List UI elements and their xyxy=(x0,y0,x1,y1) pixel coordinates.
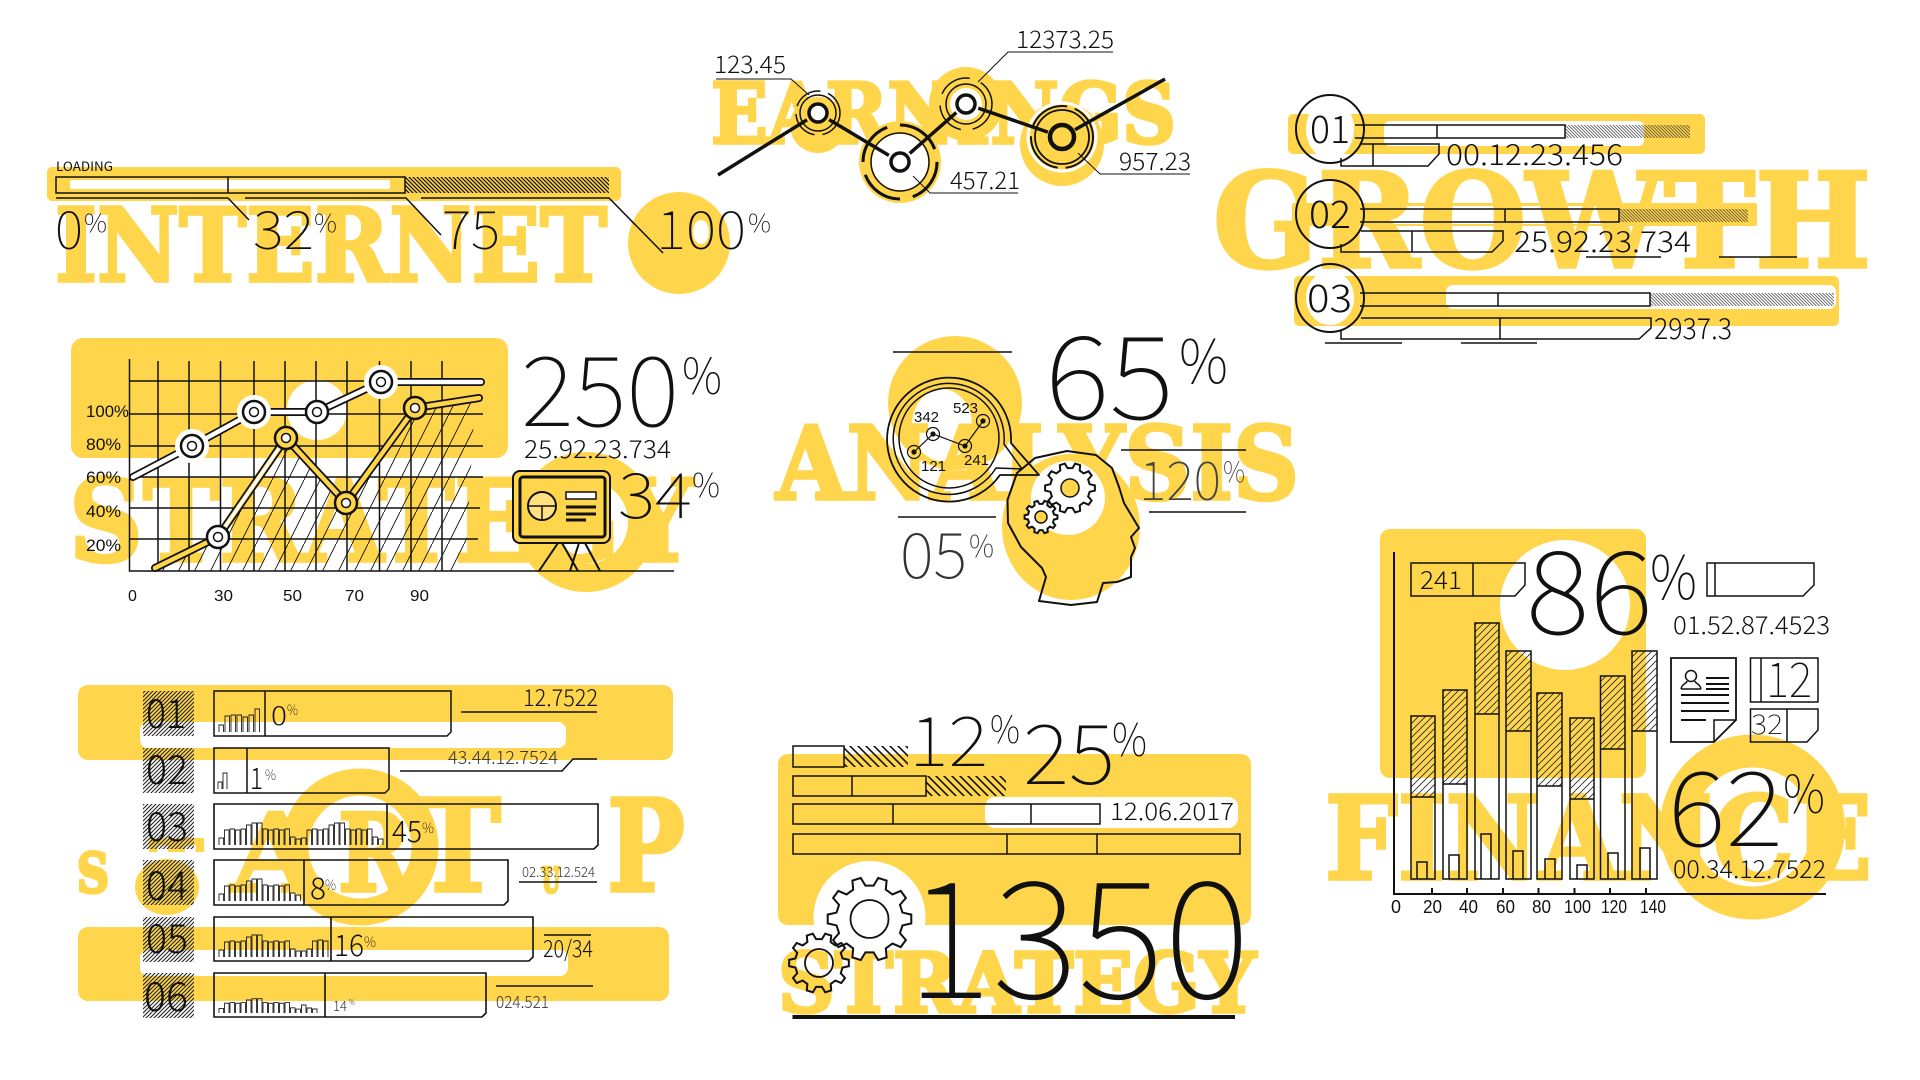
callout: 457.21: 457.21 xyxy=(950,161,1020,196)
x axis labels: 50 xyxy=(283,588,302,605)
heading: START UP letters: A xyxy=(230,791,323,917)
series 1 line xyxy=(133,382,481,477)
row 02: % xyxy=(265,765,276,785)
x axis labels: 100 xyxy=(1564,897,1591,917)
value: 86%: % xyxy=(1650,530,1697,617)
row 02: 1 xyxy=(250,754,263,798)
row 02: 02 xyxy=(1309,184,1351,239)
row 03 xyxy=(1296,264,1834,348)
callout: 457.21 xyxy=(913,161,1020,196)
value: 05%: % xyxy=(969,522,994,566)
row 02 xyxy=(143,738,597,798)
value: 75: 75 xyxy=(442,189,500,265)
panel: internet loading bar xyxy=(47,156,771,305)
yellow card with white cut-outs xyxy=(778,746,1251,973)
row 03: % xyxy=(422,818,434,838)
row 04: 04 xyxy=(146,854,188,912)
trend line xyxy=(718,79,1165,175)
value: 12% xyxy=(909,686,1020,786)
icon: speech bubble chart xyxy=(887,378,1039,502)
x axis labels: 40 xyxy=(1459,897,1478,917)
icon: speech bubble chart: 523 xyxy=(953,400,978,417)
heading: START UP letters: S xyxy=(77,841,109,905)
value: 05%: 05 xyxy=(900,506,967,597)
row 04: % xyxy=(325,875,336,895)
row 05: % xyxy=(364,932,376,952)
row 02: 43.44.12.7524 xyxy=(448,744,558,770)
y axis labels: 40% xyxy=(86,502,121,521)
value: 0%: 0 xyxy=(55,189,83,265)
chart axes xyxy=(1394,552,1826,894)
panel: strategy bars and gears xyxy=(778,686,1257,1045)
row 01: 00.12.23.456 xyxy=(1446,132,1623,174)
value: 32% xyxy=(253,189,337,265)
panel: strategy line chart xyxy=(69,313,722,605)
heading: START UP letters: P xyxy=(607,772,685,921)
box: 12: 12 xyxy=(1766,641,1812,711)
yellow node backgrounds xyxy=(790,67,1104,203)
value: 0% xyxy=(55,189,107,265)
value: 86%: 86 xyxy=(1526,500,1653,668)
value: 1350: 1350 xyxy=(906,809,1250,1045)
heading: GROWTH: GROWTH xyxy=(1213,144,1871,298)
value: 62%: % xyxy=(1783,753,1825,829)
white node centres xyxy=(872,88,1096,190)
y axis labels xyxy=(86,402,129,555)
node 2 xyxy=(863,125,937,199)
row 03: 2937.3 xyxy=(1654,306,1732,348)
row 03: 03 xyxy=(1307,268,1352,323)
node 1 xyxy=(796,91,840,135)
value: 250%: % xyxy=(682,337,722,409)
icon: speech bubble chart: 121 xyxy=(921,458,946,475)
row 01: 01 xyxy=(1310,99,1350,154)
row 03: 03 xyxy=(146,795,188,853)
row 06: % xyxy=(349,997,355,1008)
value: 0%: % xyxy=(84,204,107,240)
yellow bars behind rows xyxy=(1288,114,1839,326)
date: 12.06.2017: 12.06.2017 xyxy=(1110,792,1234,827)
tag: 241: 241 xyxy=(1420,561,1462,597)
row 02 xyxy=(1296,180,1797,261)
value: 05% xyxy=(900,506,994,597)
row 04: 02.33.12.524 xyxy=(522,862,595,882)
y axis labels: 60% xyxy=(86,468,121,487)
panel: finance bar chart xyxy=(1325,500,1872,917)
row 01: % xyxy=(287,700,298,720)
row 01: 01 xyxy=(146,682,186,740)
y axis labels: 20% xyxy=(86,536,121,555)
yellow bars and circles xyxy=(78,685,673,1001)
row 06: 024.521 xyxy=(496,988,549,1013)
x axis labels: 70 xyxy=(345,588,364,605)
series 2 line xyxy=(155,398,479,568)
chart xyxy=(86,359,674,605)
label: LOADING: LOADING xyxy=(56,156,113,175)
row 05: 20/34 xyxy=(543,930,593,964)
yellow card and shapes xyxy=(71,338,508,458)
row 04: 8 xyxy=(310,864,326,908)
callout: 957.23: 957.23 xyxy=(1119,142,1191,177)
value: 25%: 25 xyxy=(1023,688,1115,808)
callout: 123.45 xyxy=(714,45,809,95)
icon: presentation monitor xyxy=(513,471,610,571)
bars xyxy=(1411,623,1657,879)
series 1 nodes xyxy=(175,365,398,463)
x axis labels: 20 xyxy=(1423,897,1442,917)
panel: start up rows xyxy=(77,679,685,1023)
panel: growth bars xyxy=(1213,95,1871,348)
row 05: 05 xyxy=(146,907,188,965)
value: 34%: 34 xyxy=(618,446,692,537)
value: 34%: % xyxy=(692,459,720,507)
x axis labels: 30 xyxy=(214,588,233,605)
row 02: 02 xyxy=(146,738,188,796)
row 05 xyxy=(143,907,593,965)
value: 32%: % xyxy=(314,204,337,240)
heading: START UP letters: T xyxy=(150,826,203,906)
callout: 123.45: 123.45 xyxy=(714,45,786,80)
row 03 xyxy=(143,795,598,853)
y axis labels: 100% xyxy=(86,402,129,421)
value: 12%: % xyxy=(990,699,1020,754)
heading: START UP letters: R xyxy=(338,791,412,917)
callout: 12373.25 xyxy=(978,20,1114,82)
value: 120%: 120 xyxy=(1139,437,1221,516)
node 3 xyxy=(940,78,992,130)
heading: START UP letters: T xyxy=(415,772,501,921)
value: 25%: % xyxy=(1112,704,1147,769)
box: 32: 32 xyxy=(1751,703,1783,742)
callout: 957.23 xyxy=(1078,142,1191,177)
panel: earnings line xyxy=(711,20,1191,203)
value: 00.34.12.7522: 00.34.12.7522 xyxy=(1673,850,1826,886)
x axis labels: 60 xyxy=(1496,897,1515,917)
row 05: 16 xyxy=(334,921,364,965)
x axis labels xyxy=(128,588,429,605)
x axis labels: 120 xyxy=(1601,897,1627,917)
row 01 xyxy=(1296,95,1690,174)
value: 25.92.23.734: 25.92.23.734 xyxy=(524,430,671,466)
row 06 xyxy=(143,965,593,1023)
x axis labels xyxy=(1391,897,1666,917)
row 03: 45 xyxy=(392,807,422,851)
x axis labels: 140 xyxy=(1640,897,1666,917)
heading: STRATEGY: STRATEGY xyxy=(69,455,694,588)
empty tag xyxy=(1707,563,1814,596)
value: 62%: 62 xyxy=(1668,725,1783,876)
value: 250%: 250 xyxy=(521,313,679,454)
node 4 xyxy=(1031,106,1093,168)
heading: STRATEGY: STRATEGY xyxy=(778,936,1257,1032)
heading: START UP letters xyxy=(78,796,684,895)
icon: speech bubble chart: 342 xyxy=(914,409,939,426)
tag: 241 xyxy=(1411,561,1525,597)
y axis labels: 80% xyxy=(86,435,121,454)
top rule xyxy=(893,352,1246,517)
value: 120%: % xyxy=(1223,451,1245,491)
row 02: 25.92.23.734 xyxy=(1514,219,1691,261)
x axis labels: 0 xyxy=(128,588,137,605)
heading: START UP letters: U xyxy=(542,861,560,901)
box: 32 xyxy=(1750,703,1818,742)
value: 25% xyxy=(1023,688,1147,808)
x axis labels: 90 xyxy=(410,588,429,605)
yellow backdrop bar and circle xyxy=(47,167,730,294)
row 06: 06 xyxy=(144,965,188,1023)
value: 100%: % xyxy=(748,204,771,240)
underline rule xyxy=(792,1015,1235,1019)
x axis labels: 80 xyxy=(1532,897,1551,917)
bar rows xyxy=(793,746,1240,854)
yellow circles xyxy=(888,336,1022,470)
row 06: 14 xyxy=(333,996,347,1016)
yellow ring behind monitor xyxy=(530,466,642,578)
value: 32%: 32 xyxy=(253,189,314,265)
value: 01.52.87.4523: 01.52.87.4523 xyxy=(1673,606,1830,642)
value: 65%: 65 xyxy=(1045,285,1174,453)
value: 65% xyxy=(1045,285,1228,453)
yellow card and circles xyxy=(1380,529,1828,903)
value: 65%: % xyxy=(1179,314,1228,401)
row 01: 0 xyxy=(271,696,287,733)
callout: 12373.25: 12373.25 xyxy=(1016,20,1114,55)
leader lines xyxy=(56,198,663,253)
icon: document with person xyxy=(1671,658,1736,742)
icon: speech bubble chart: 241 xyxy=(964,452,989,469)
progress bar xyxy=(56,177,609,193)
row 01 xyxy=(143,679,598,740)
series 2 nodes xyxy=(207,397,426,548)
icon: gears xyxy=(789,878,911,992)
value: 100%: 100 xyxy=(656,189,746,265)
value: 34% xyxy=(618,446,720,537)
heading: EARNINGS: EARNINGS xyxy=(711,65,1176,163)
heading: ANALYSIS: ANALYSIS xyxy=(775,404,1299,523)
heading: INTERNET: INTERNET xyxy=(55,186,607,305)
x axis labels: 0 xyxy=(1391,897,1401,917)
panel: analysis xyxy=(775,285,1299,605)
row 04 xyxy=(143,854,597,912)
icon: head with gears xyxy=(1002,451,1140,605)
value: 62% xyxy=(1668,725,1825,876)
row 01: 12.7522 xyxy=(523,679,598,713)
value: 12%: 12 xyxy=(909,686,988,786)
